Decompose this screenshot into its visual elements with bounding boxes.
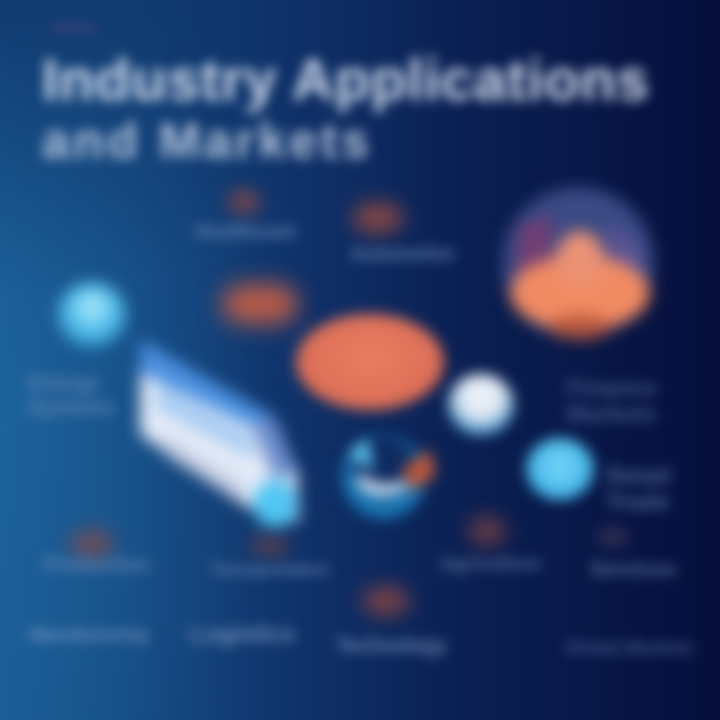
icon: logistics	[250, 536, 290, 556]
icon: bottom center	[362, 586, 410, 616]
label left: Systems	[28, 396, 114, 419]
icon: blue bubble right	[526, 438, 594, 500]
illustration: isometric device	[127, 335, 310, 538]
title: Industry Applications	[42, 48, 650, 113]
label bottom right: Agriculture	[440, 554, 541, 575]
icon: far right	[598, 528, 628, 546]
icon: top label 2	[352, 202, 404, 234]
icon: top label 1	[228, 190, 260, 214]
icon: bottom left	[70, 530, 114, 558]
label right upper: Finance	[566, 375, 657, 402]
label text 1: Healthcare	[195, 221, 297, 243]
label bottom center: Technology	[336, 635, 447, 657]
label bottom left lower: Manufacturing	[30, 625, 147, 644]
label right lower: Trade	[606, 489, 670, 516]
illustration: person in circle	[494, 179, 662, 351]
title: and Markets	[42, 113, 372, 169]
label far right: Services	[590, 558, 676, 581]
icon: bottom right	[468, 516, 506, 546]
icon: gauge	[334, 430, 445, 527]
label left: Energy	[28, 372, 99, 395]
label bottom left upper: Production	[44, 554, 150, 576]
label text 2: Automotive	[350, 244, 454, 265]
label bottom far right: Global Markets	[565, 638, 694, 658]
icon: blue bubble left	[58, 283, 126, 347]
label right upper: Markets	[566, 401, 657, 428]
label left	[24, 372, 116, 420]
central orange ellipse	[296, 314, 444, 410]
label right lower: Retail	[606, 463, 671, 490]
title	[36, 48, 655, 169]
label right lower	[602, 462, 675, 516]
orange tag	[222, 284, 298, 324]
label logistics lower: Logistics	[190, 621, 295, 648]
label logistics upper: Transportation	[210, 560, 329, 579]
eyebrow label	[52, 24, 96, 32]
icon: white and blue bubble	[448, 374, 514, 436]
label right upper	[563, 375, 658, 428]
